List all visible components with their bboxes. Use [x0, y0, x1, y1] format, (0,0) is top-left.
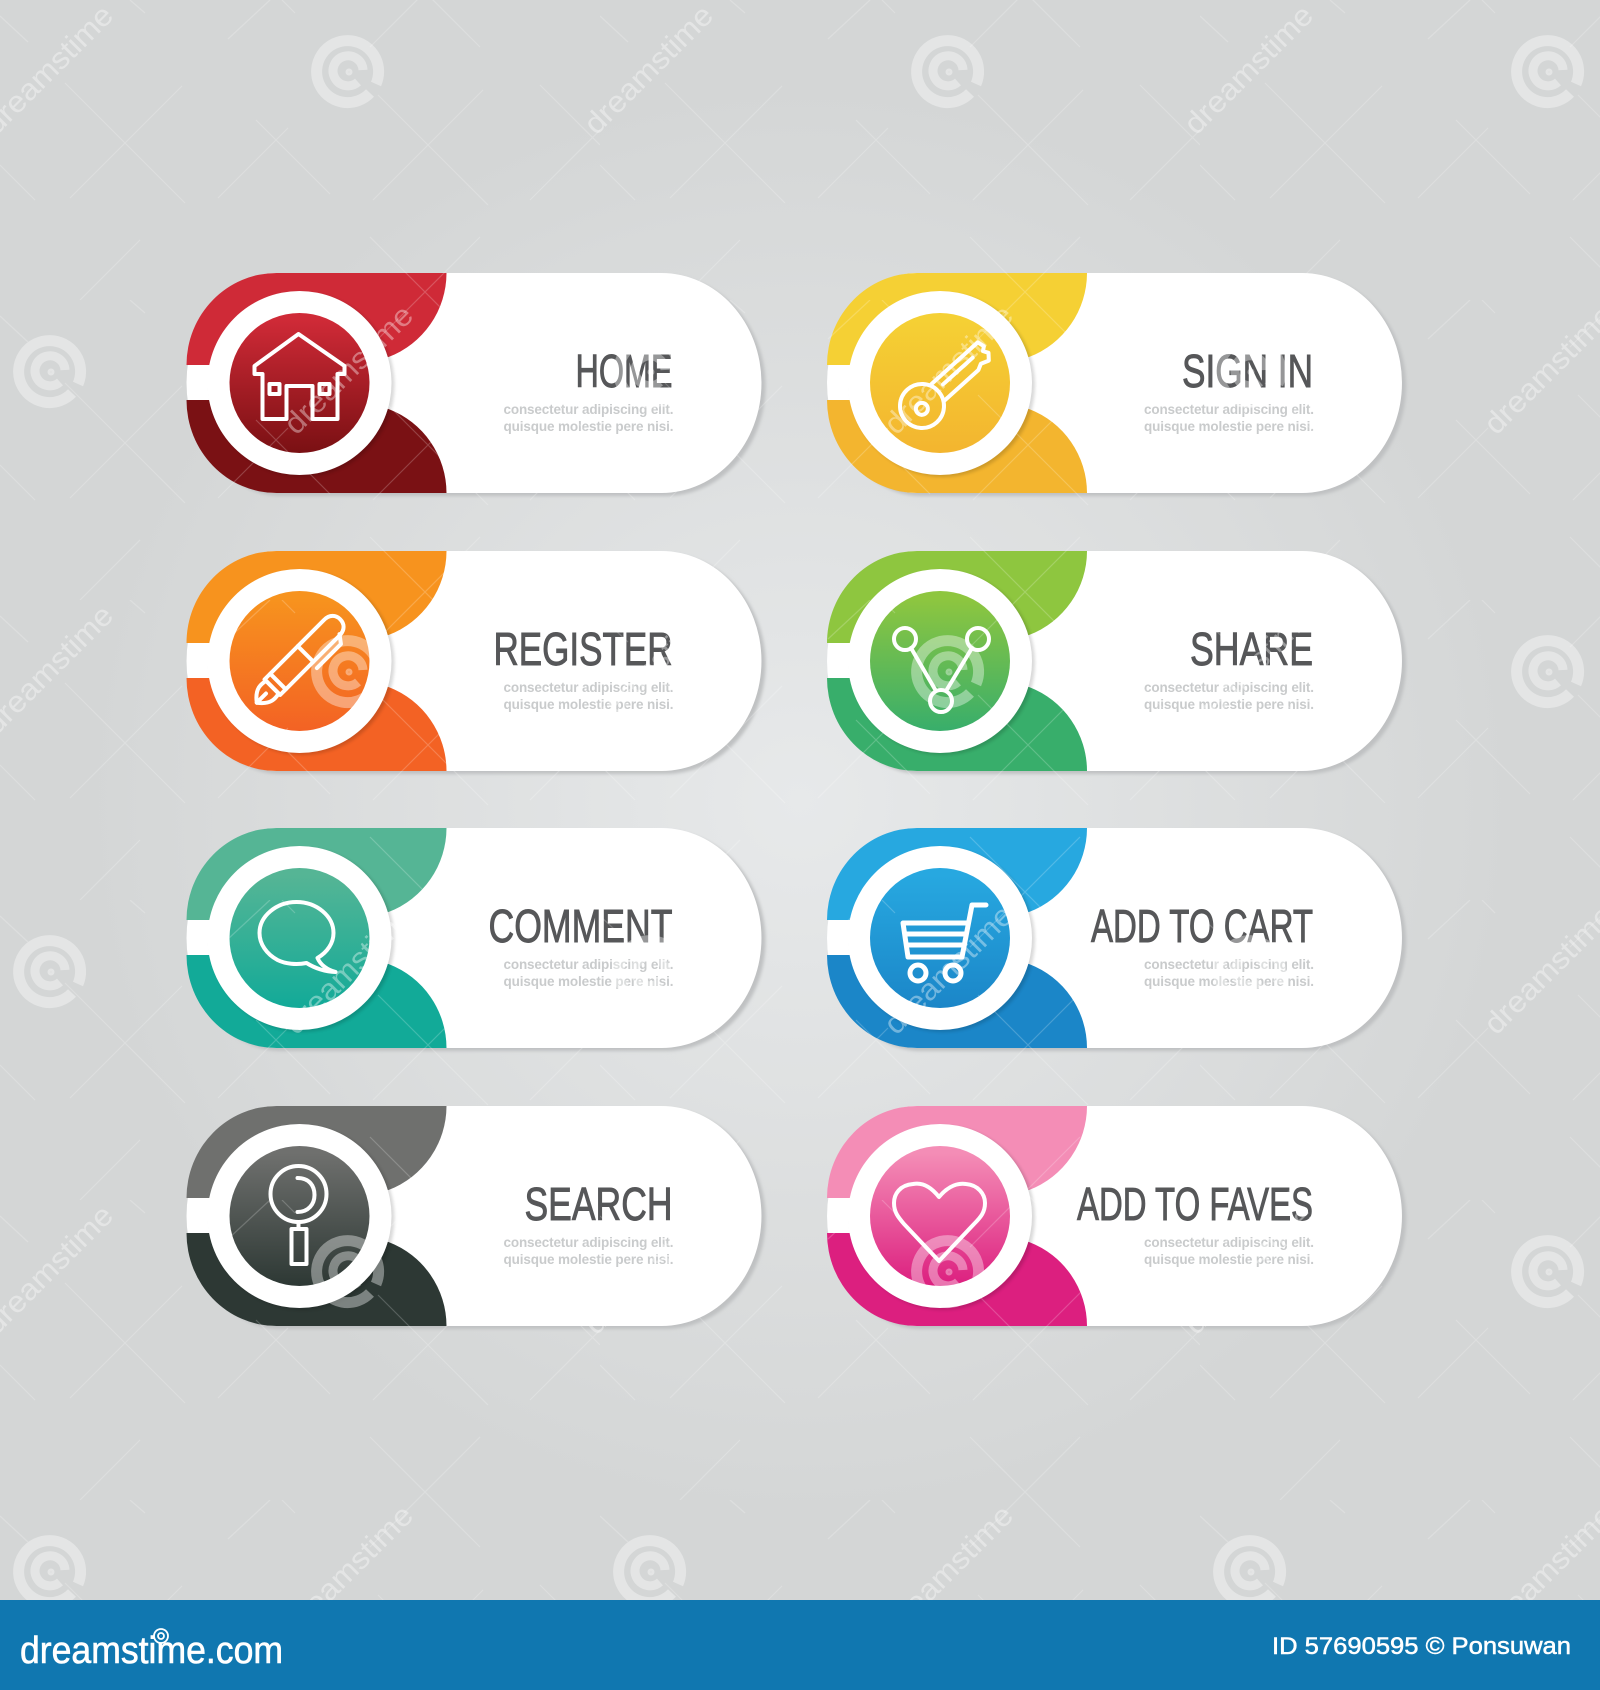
- description: COMMENT: [504, 957, 674, 989]
- description: SEARCH: consectetur adipiscing elit.: [504, 1235, 674, 1250]
- banner: COMMENT: [186, 828, 765, 1051]
- icon: footer logo spiral: [154, 1629, 168, 1643]
- icon: house: [254, 334, 344, 419]
- description: HOME: quisque molestie pere nisi.: [504, 419, 674, 434]
- description: HOME: [504, 402, 674, 434]
- footer logo text: dreamstime.com: [20, 1630, 283, 1672]
- description: SHARE: [1144, 680, 1314, 712]
- icon: speech bubble: [260, 902, 336, 972]
- icon: magnifying glass: [270, 1166, 326, 1264]
- description: ADD TO FAVES: [1144, 1235, 1314, 1267]
- description: REGISTER: consectetur adipiscing elit.: [504, 680, 674, 695]
- icon: heart: [894, 1184, 985, 1261]
- heading: REGISTER: REGISTER: [494, 623, 672, 675]
- watermark overlay: dreamstime: [578, 0, 720, 141]
- footer bar: [0, 1600, 1600, 1690]
- watermark overlay: dreamstime: [278, 299, 420, 441]
- icon: key: [891, 332, 1001, 437]
- watermark overlay: dreamstime: [578, 599, 720, 741]
- heading: ADD TO FAVES: ADD TO FAVES: [1077, 1178, 1313, 1230]
- heading: HOME: HOME: [576, 345, 672, 397]
- banner: REGISTER: [186, 551, 765, 774]
- banner: ADD TO CART: [827, 828, 1406, 1051]
- description: ADD TO FAVES: consectetur adipiscing elit.: [1144, 1235, 1314, 1250]
- description: ADD TO FAVES: quisque molestie pere nisi.: [1144, 1252, 1314, 1267]
- footer image id and credit: ID 57690595 © Ponsuwan: [1272, 1633, 1571, 1660]
- heading: SHARE: SHARE: [1190, 623, 1313, 675]
- icon: fountain pen: [249, 612, 353, 715]
- description: SIGN IN: [1144, 402, 1314, 434]
- description: SIGN IN: consectetur adipiscing elit.: [1144, 402, 1314, 417]
- description: SHARE: consectetur adipiscing elit.: [1144, 680, 1314, 695]
- icon: shopping cart: [903, 905, 986, 981]
- banner: SEARCH: [186, 1106, 765, 1329]
- heading: COMMENT: COMMENT: [488, 900, 672, 952]
- description: SHARE: quisque molestie pere nisi.: [1144, 697, 1314, 712]
- description: COMMENT: quisque molestie pere nisi.: [504, 974, 674, 989]
- description: ADD TO CART: quisque molestie pere nisi.: [1144, 974, 1314, 989]
- banner: SHARE: [827, 551, 1406, 774]
- description: REGISTER: [504, 680, 674, 712]
- description: SEARCH: [504, 1235, 674, 1267]
- heading: SEARCH: SEARCH: [524, 1178, 672, 1230]
- watermark overlay: dreamstime: [278, 899, 420, 1041]
- description: SEARCH: quisque molestie pere nisi.: [504, 1252, 674, 1267]
- watermark overlay: dreamstime: [878, 899, 1020, 1041]
- watermark overlay: dreamstime: [1178, 1199, 1320, 1341]
- description: HOME: consectetur adipiscing elit.: [504, 402, 674, 417]
- heading: SIGN IN: SIGN IN: [1182, 345, 1313, 397]
- watermark overlay: dreamstime: [878, 1499, 1020, 1641]
- description: ADD TO CART: [1144, 957, 1314, 989]
- description: REGISTER: quisque molestie pere nisi.: [504, 697, 674, 712]
- watermark overlay: dreamstime: [878, 299, 1020, 441]
- description: SIGN IN: quisque molestie pere nisi.: [1144, 419, 1314, 434]
- watermark overlay: dreamstime: [278, 1499, 420, 1641]
- watermark overlay: dreamstime: [1178, 599, 1320, 741]
- banner: SIGN IN: [827, 273, 1406, 496]
- watermark overlay: dreamstime: [578, 1199, 720, 1341]
- heading: ADD TO CART: ADD TO CART: [1091, 900, 1313, 952]
- description: COMMENT: consectetur adipiscing elit.: [504, 957, 674, 972]
- watermark overlay: dreamstime: [1178, 0, 1320, 141]
- banner: HOME: [186, 273, 765, 496]
- description: ADD TO CART: consectetur adipiscing elit.: [1144, 957, 1314, 972]
- icon: share nodes: [894, 628, 989, 712]
- banner: ADD TO FAVES: [827, 1106, 1406, 1329]
